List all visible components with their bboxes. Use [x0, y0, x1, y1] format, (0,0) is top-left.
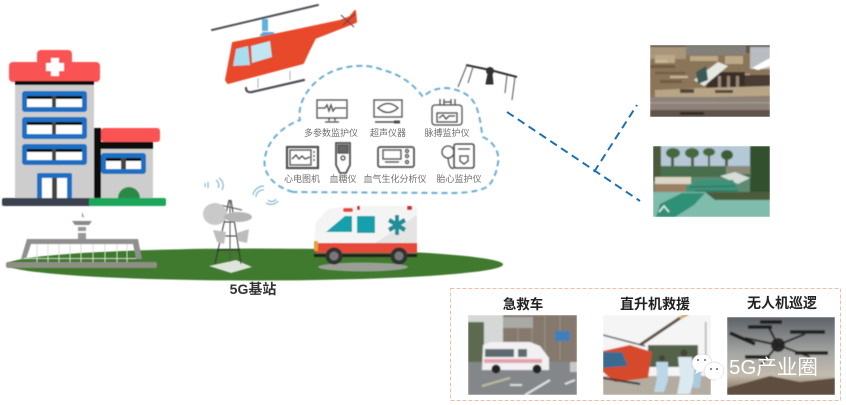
device labels: 胎心监护仪 — [436, 173, 482, 184]
icon: ECG machine — [287, 147, 318, 168]
icon: terminal building — [6, 212, 157, 268]
watermark: 5G产业圈: 5G产业圈 — [729, 356, 818, 379]
ground ellipse — [7, 248, 503, 280]
dashed signal lines — [507, 105, 640, 201]
label: 5G base station: 5G基站 — [230, 281, 276, 297]
helicopter — [212, 5, 356, 92]
heading: helicopter rescue: 直升机救援 — [620, 296, 690, 312]
panel: rescue methods — [450, 288, 840, 400]
icon: hospital — [2, 50, 166, 206]
wireless signal icons — [205, 178, 278, 204]
cloud outline — [264, 66, 498, 193]
5G base station tower — [203, 200, 252, 273]
icon: glucose meter — [336, 143, 350, 173]
medical devices — [287, 99, 474, 173]
device labels: 超声仪器 — [370, 127, 406, 138]
device labels: 脉搏监护仪 — [424, 127, 470, 138]
icon: blood gas analyser — [378, 147, 414, 167]
photo: flooded village — [653, 146, 770, 217]
icon: pulse monitor — [432, 99, 462, 125]
ambulance — [314, 206, 417, 272]
icon: multi-parameter monitor — [317, 100, 347, 122]
device labels: 多参数监护仪 — [304, 127, 358, 138]
heading: drone patrol: 无人机巡逻 — [747, 295, 817, 311]
icon: ultrasound — [374, 100, 402, 122]
icon: fetal monitor — [442, 144, 474, 168]
photo: disaster debris — [650, 45, 770, 117]
photo: ambulance — [468, 315, 577, 395]
heading: ambulance: 急救车 — [503, 296, 543, 312]
device labels: 血糖仪 — [329, 173, 357, 184]
device labels: 血气生化分析仪 — [363, 173, 427, 184]
photo: drone patrol — [727, 317, 835, 395]
icon: drone — [458, 65, 517, 100]
photo: helicopter rescue — [603, 314, 711, 395]
watermark: WeChat icon — [692, 354, 724, 382]
device labels: 心电图机 — [284, 173, 320, 184]
device labels — [284, 127, 482, 184]
